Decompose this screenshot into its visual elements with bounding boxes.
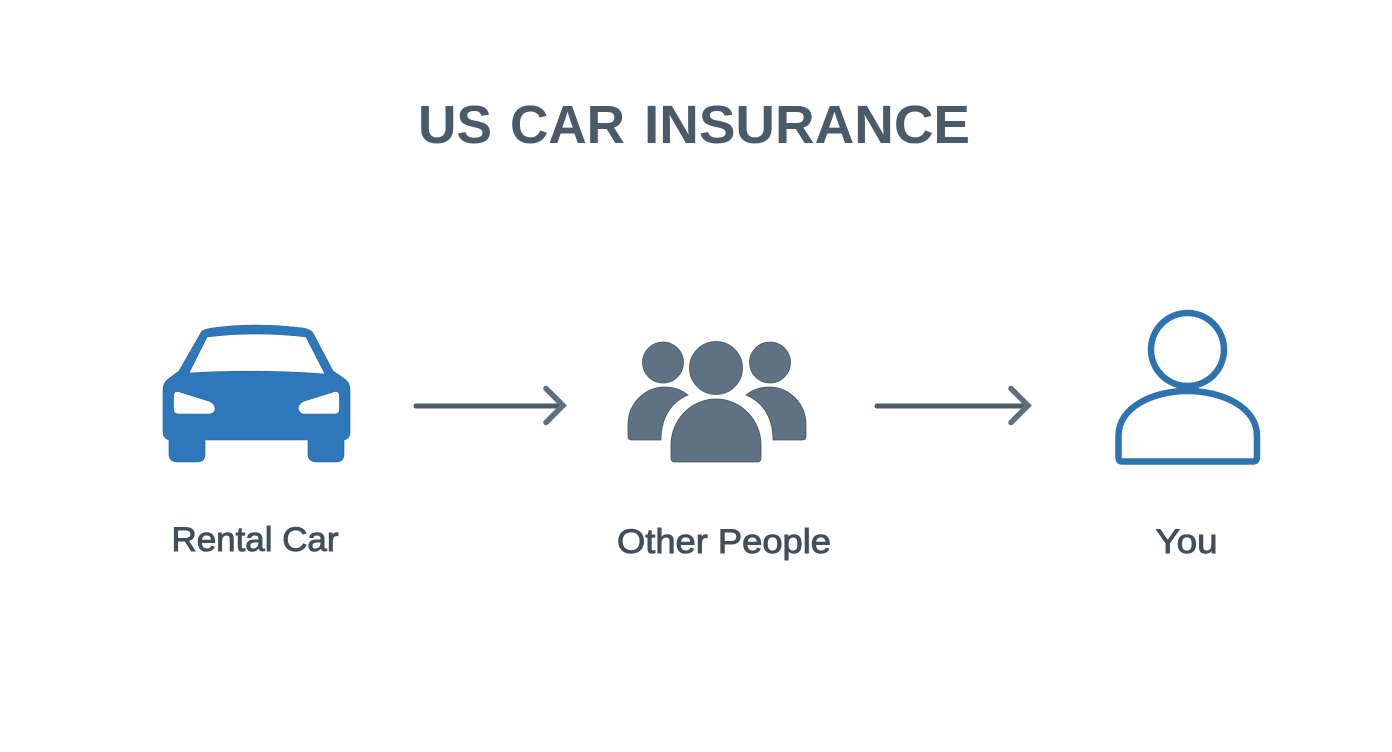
icon: rental car (163, 325, 350, 462)
label: Rental Car: Rental Car (172, 521, 338, 559)
arrow: rental car to other people (416, 388, 563, 422)
title: INSURANCE (644, 95, 970, 155)
label: You: You (1156, 523, 1218, 561)
title: CAR (510, 95, 625, 155)
label: Other People: Other People (617, 523, 831, 561)
icon: you (1118, 313, 1257, 462)
arrow: other people to you (877, 388, 1028, 422)
icon: other people (628, 342, 806, 462)
title: US (418, 95, 492, 155)
